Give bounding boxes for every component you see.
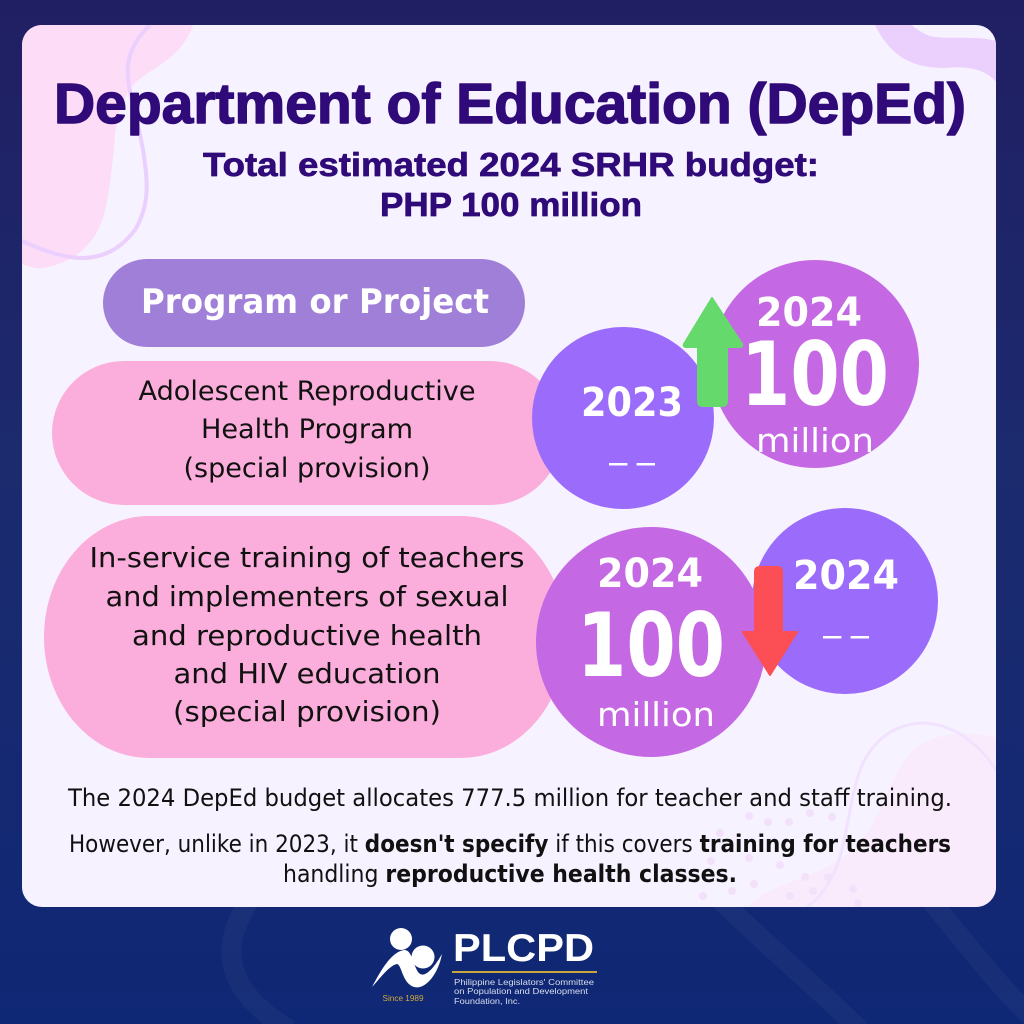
subtitle: Total estimated 2024 SRHR budget: (203, 146, 819, 183)
circle: 2024 100 million (row 1): 100 (741, 323, 889, 426)
circle: 2024 none (row 2) (752, 508, 938, 694)
circle: 2024 100 million (row 2): 2024 (597, 551, 703, 597)
logo full name: Philippine Legislators' Committee (454, 977, 594, 987)
decoration: bottom-right dots (699, 809, 862, 907)
logo tagline: Since 1989 (382, 994, 424, 1003)
footer note (67, 784, 952, 888)
title: Department of Education (DepEd) (54, 72, 966, 136)
footer note: However, unlike in 2023, it doesn't specify if this covers training for teachers (69, 830, 951, 858)
circle: 2024 100 million (row 2): million (597, 695, 715, 734)
circle: 2024 100 million (row 2) (536, 527, 766, 757)
row 2 pill: In-service training: and implementers of sexual (106, 581, 508, 613)
subtitle: PHP 100 million (380, 186, 642, 223)
subtitle (203, 146, 819, 223)
row 1 pill: Adolescent Reproductive Health Program: (special provision) (184, 453, 430, 484)
circle: 2023 none (row 1) (532, 327, 714, 509)
row 2 pill: In-service training: In-service training of teachers (90, 542, 524, 574)
heading pill: Program or Project (103, 259, 525, 347)
icon: green up arrow (684, 298, 742, 406)
heading pill: Program or Project: Program or Project (141, 282, 489, 322)
circle: 2024 100 million (row 1): 2024 (756, 290, 862, 336)
row 2 pill: In-service training: and reproductive health (132, 620, 482, 652)
logo full name (454, 977, 594, 1006)
logo: PLCPD (372, 927, 597, 1006)
decoration: top-left line (22, 25, 150, 258)
footer note: The 2024 DepEd budget allocates 777.5 million for teacher and staff training. (67, 784, 952, 812)
circle: 2024 100 million (row 2): 100 (577, 594, 725, 697)
decoration: bottom-right line (837, 722, 962, 862)
circle: 2023 none (row 1): 2023 (581, 380, 683, 426)
decoration: bottom-right blob (976, 887, 996, 907)
row 1 pill: Adolescent Reproductive Health Program: Adolescent Reproductive (138, 376, 476, 407)
logo wordmark: PLCPD (453, 927, 594, 970)
circle: 2024 none (row 2): 2024 (793, 553, 899, 599)
circle: 2023 none (row 1): – – (609, 441, 656, 483)
logo full name: on Population and Development (454, 986, 589, 996)
decoration: top-right wave (875, 25, 996, 82)
icon: red down arrow (743, 567, 797, 675)
circle: 2024 100 million (row 1) (711, 260, 919, 468)
row 2 pill: In-service training (44, 516, 566, 758)
row 2 pill: In-service training: (special provision) (173, 696, 441, 728)
logo full name: Foundation, Inc. (454, 996, 520, 1006)
icon: logo figures (372, 928, 442, 987)
row 2 pill: In-service training: and HIV education (174, 658, 440, 690)
row 1 pill: Adolescent Reproductive Health Program (52, 361, 562, 505)
circle: 2024 100 million (row 1): million (756, 421, 874, 460)
circle: 2024 none (row 2): – – (823, 614, 870, 656)
row 1 pill: Adolescent Reproductive Health Program: Health Program (201, 414, 413, 445)
decoration: top-left pink blob (22, 25, 193, 268)
footer note: handling reproductive health classes. (283, 860, 737, 888)
